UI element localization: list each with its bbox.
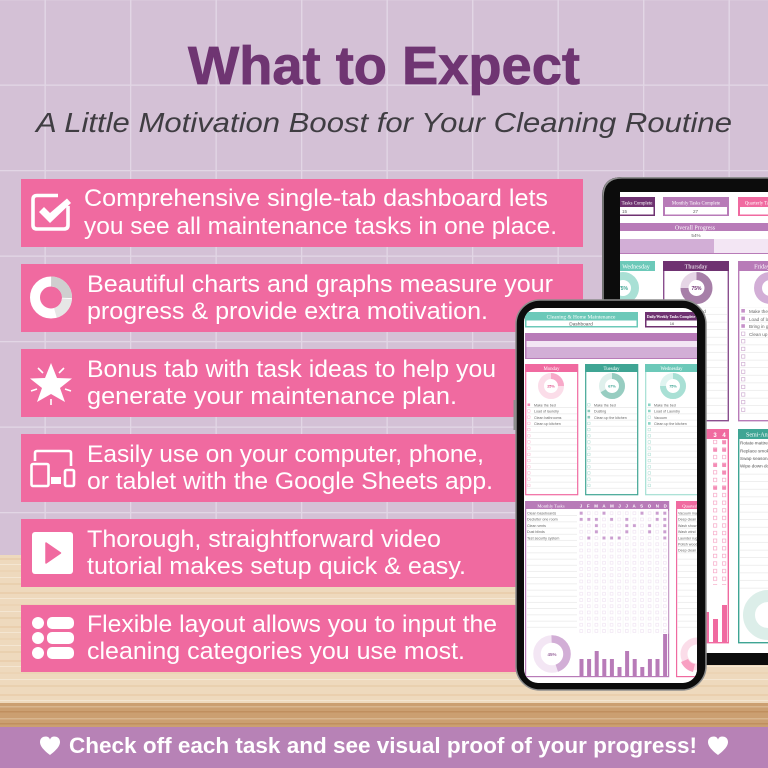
- icon: donut chart: [33, 280, 69, 315]
- tablet: weekly tasks card: 15: [622, 209, 628, 214]
- feature: devices: Easily use on your computer, phone,: [87, 441, 484, 468]
- phone: Wednesday card: Wednesday: [660, 367, 683, 372]
- feature: dashboard: Comprehensive single-tab dashboard lets: [84, 185, 548, 212]
- phone: monthly tasks card: Monthly Tasks: [537, 503, 565, 508]
- phone: Monday card: 25%: [547, 384, 555, 388]
- phone: quarterly tasks card: Quarterly: [682, 503, 700, 508]
- feature: flexible layout: [21, 605, 583, 672]
- icon: devices: [32, 451, 74, 486]
- phone: monthly tasks card: Declutter one room: [527, 518, 558, 522]
- phone: Monday card: Clean bathrooms: [534, 416, 562, 420]
- phone: monthly progress donut: [537, 639, 567, 669]
- tablet: overall progress bar: [620, 223, 768, 254]
- icon: right heart: [708, 736, 728, 755]
- tablet: Thursday card: Bins to curb: [678, 324, 703, 329]
- phone: Wednesday card: 75%: [669, 384, 677, 388]
- tablet: monthly tasks card: Monthly Tasks Complete: [672, 202, 720, 206]
- phone: Monday card: [525, 364, 578, 495]
- tablet: quarterly tasks card: [738, 197, 768, 216]
- phone: monthly progress donut: 45%: [547, 652, 557, 657]
- feature: charts: progress & provide extra motivation.: [87, 298, 488, 325]
- phone: dashboard title card: [525, 312, 638, 328]
- phone: Tuesday card: [585, 364, 638, 495]
- tablet: overall progress bar: Overall Progress: [675, 226, 716, 232]
- feature: video: tutorial makes setup quick & easy.: [87, 553, 466, 580]
- phone: Monday card: Clean up kitchen: [534, 422, 561, 426]
- phone: Monday card: Load of laundry: [534, 410, 559, 414]
- phone: Tuesday card: 67%: [608, 384, 616, 388]
- phone: overall progress bar: [525, 333, 700, 359]
- feature: dashboard: [21, 179, 583, 247]
- subtitle: A Little Motivation Boost for Your Cleaning Routine: [34, 107, 732, 138]
- phone: quarterly tasks card: Deep clean: [678, 549, 696, 553]
- phone: Tuesday card: Tuesday: [603, 367, 620, 372]
- phone: quarterly tasks card: [676, 501, 697, 678]
- phone: Wednesday card: Clean up the kitchen: [654, 422, 687, 426]
- tablet: overall progress bar: 54%: [691, 233, 701, 238]
- phone: daily and weekly tasks card: [645, 312, 701, 328]
- phone mockup: [514, 300, 710, 690]
- feature: flexible layout: Flexible layout allows you to input the: [87, 611, 497, 638]
- tablet: annual tasks card: [706, 429, 729, 644]
- phone: Monday card: Monday: [544, 367, 560, 372]
- feature: dashboard: you see all maintenance tasks in one place.: [84, 213, 557, 240]
- tablet: Wednesday card: [620, 261, 655, 300]
- icon: left heart: [40, 736, 60, 755]
- tablet: Thursday card: Make the bed: [678, 309, 706, 314]
- tablet: semi-annual tasks card: [738, 429, 768, 643]
- feature: video: Thorough, straightforward video: [87, 526, 441, 553]
- icon: checkbox: [33, 196, 71, 229]
- phone: Monday card: Make the bed: [534, 404, 556, 408]
- tablet: Thursday card: Thursday: [685, 264, 707, 270]
- tablet: monthly tasks card: [663, 197, 729, 216]
- phone: quarterly tasks card: Launder rug: [678, 536, 697, 540]
- phone: daily and weekly tasks card: 16: [670, 321, 675, 326]
- feature: charts: [21, 264, 583, 332]
- tablet: Thursday card: Mop: [678, 317, 687, 322]
- phone: Tuesday card: Make the bed: [594, 404, 616, 408]
- tablet: Thursday card: 75%: [691, 286, 702, 292]
- phone: monthly tasks card: [525, 501, 670, 677]
- phone: dashboard title card: Cleaning & Home Maintenance: [547, 314, 616, 320]
- footer banner: Check off each task and see visual proof of your progress!: [69, 733, 697, 758]
- tablet: weekly tasks card: Tasks Complete: [622, 202, 652, 206]
- feature: flexible layout: cleaning categories you use most.: [87, 638, 465, 665]
- feature: bonus tab: generate your maintenance plan.: [87, 383, 457, 410]
- phone: Wednesday card: Vacuum: [654, 416, 667, 420]
- tablet: monthly tasks card: 27: [693, 209, 699, 214]
- tablet: weekly tasks card: [620, 197, 655, 216]
- title: What to Expect: [188, 36, 580, 96]
- footer banner: [0, 727, 768, 768]
- feature: devices: [21, 434, 583, 502]
- phone: quarterly tasks card: Wash show: [678, 524, 697, 528]
- phone: Tuesday card: Clean up the kitchen: [594, 416, 627, 420]
- tablet: Wednesday card: 75%: [618, 286, 629, 292]
- tablet: annual tasks card: 3: [713, 433, 717, 439]
- wooden table: [0, 555, 768, 728]
- feature: charts: Beautiful charts and graphs measure your: [87, 271, 553, 298]
- phone: Wednesday card: [645, 364, 700, 495]
- feature: devices: or tablet with the Google Sheets app.: [87, 468, 493, 495]
- icon: list: [32, 617, 74, 659]
- tablet: Wednesday card: Wednesday: [622, 264, 650, 270]
- phone: monthly tasks card: Dust blinds: [527, 530, 545, 534]
- tablet: Thursday card: [663, 261, 729, 421]
- phone: monthly tasks card: Clean baseboards: [527, 512, 556, 516]
- tablet mockup: [602, 177, 768, 665]
- phone: quarterly tasks card: Deep clean: [678, 518, 696, 522]
- background wall: [0, 0, 768, 556]
- phone: Wednesday card: Load of Laundry: [654, 410, 680, 414]
- phone: monthly tasks card: J F M A M J J A S O N D: [580, 503, 667, 508]
- phone: Tuesday card: Dusting: [594, 410, 606, 414]
- icon: star: [30, 363, 72, 405]
- phone: quarterly tasks card: Polish wood: [678, 542, 697, 546]
- icon: play button: [32, 532, 73, 574]
- feature: bonus tab: Bonus tab with task ideas to help you: [87, 356, 496, 383]
- feature: bonus tab: [21, 349, 583, 417]
- feature: video: [21, 519, 583, 587]
- phone: monthly tasks card: Clean vents: [527, 524, 546, 528]
- tablet: annual tasks card: 4: [722, 433, 726, 439]
- phone: quarterly tasks card: Vacuum mat: [678, 512, 698, 516]
- phone: dashboard title card: Dashboard: [569, 321, 593, 327]
- tablet: Friday card: [738, 261, 768, 421]
- phone: quarterly tasks card: Wash wind: [678, 530, 695, 534]
- tablet: Thursday card: Clean kitchen: [678, 332, 706, 337]
- phone: monthly tasks card: Test security system: [527, 536, 559, 540]
- phone: Wednesday card: Make the bed: [654, 404, 676, 408]
- phone: monthly checked boxes: [580, 512, 666, 539]
- phone: daily and weekly tasks card: Daily/Weekly Tasks Complete: [647, 315, 695, 319]
- phone: monthly bar chart: [580, 634, 667, 676]
